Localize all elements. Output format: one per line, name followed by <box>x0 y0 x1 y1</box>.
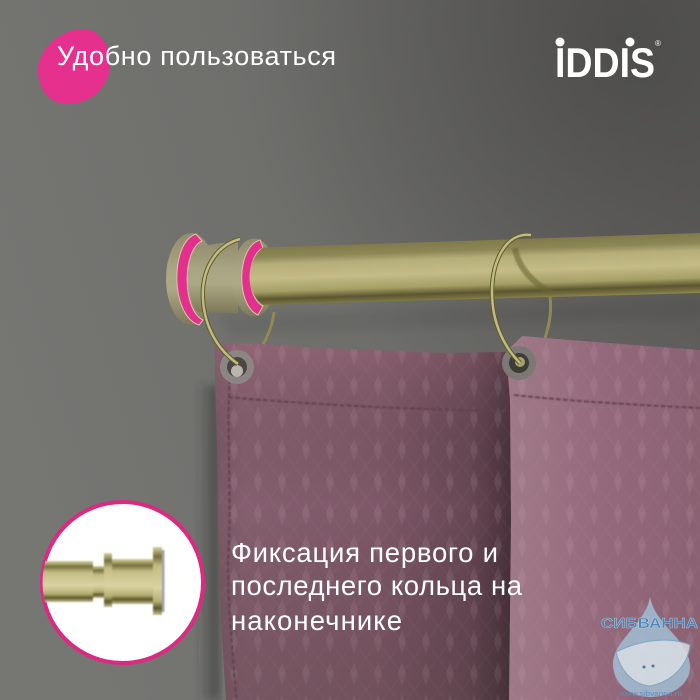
watermark face <box>642 664 654 668</box>
cap body <box>188 241 238 313</box>
ring shadow on rod <box>515 248 552 293</box>
front left ring <box>203 239 240 364</box>
inset circle <box>40 502 203 663</box>
pink ring on inner flange <box>242 240 263 315</box>
curtain right panel <box>506 336 700 700</box>
rod front end <box>250 246 300 305</box>
watermark drop <box>613 597 690 697</box>
watermark bathtub <box>616 640 690 686</box>
rod end cap <box>166 233 300 325</box>
curtain rod <box>250 233 700 305</box>
outer flange <box>166 233 216 325</box>
curtain right panel texture <box>506 336 700 700</box>
inner flange <box>232 238 276 316</box>
caption <box>231 537 523 636</box>
watermark <box>601 597 698 698</box>
curtain left panel texture <box>215 344 514 700</box>
curtain left panel <box>215 344 514 700</box>
curtain shadow on wall <box>196 385 220 700</box>
curtain <box>215 336 700 700</box>
inset end cap illustration <box>40 547 164 615</box>
caption: наконечнике <box>231 605 402 636</box>
curtain left panel shading <box>215 344 514 700</box>
left grommet <box>220 350 254 384</box>
watermark url: www.sibvanna.ru <box>619 691 682 698</box>
logo: IDDIS <box>555 39 655 86</box>
right grommet <box>502 346 536 380</box>
rod shadow on wall <box>220 300 700 336</box>
logo: ® <box>655 39 661 48</box>
heading: Удобно пользоваться <box>57 41 336 71</box>
curtain stitching <box>228 372 700 700</box>
pink blob <box>38 29 110 104</box>
watermark name: СИБВАННА <box>601 615 698 632</box>
pink ring on outer flange <box>177 234 203 325</box>
caption: последнего кольца на <box>231 570 523 601</box>
caption: Фиксация первого и <box>231 537 498 568</box>
back of curtain rings <box>262 297 551 346</box>
front right ring <box>492 235 531 363</box>
